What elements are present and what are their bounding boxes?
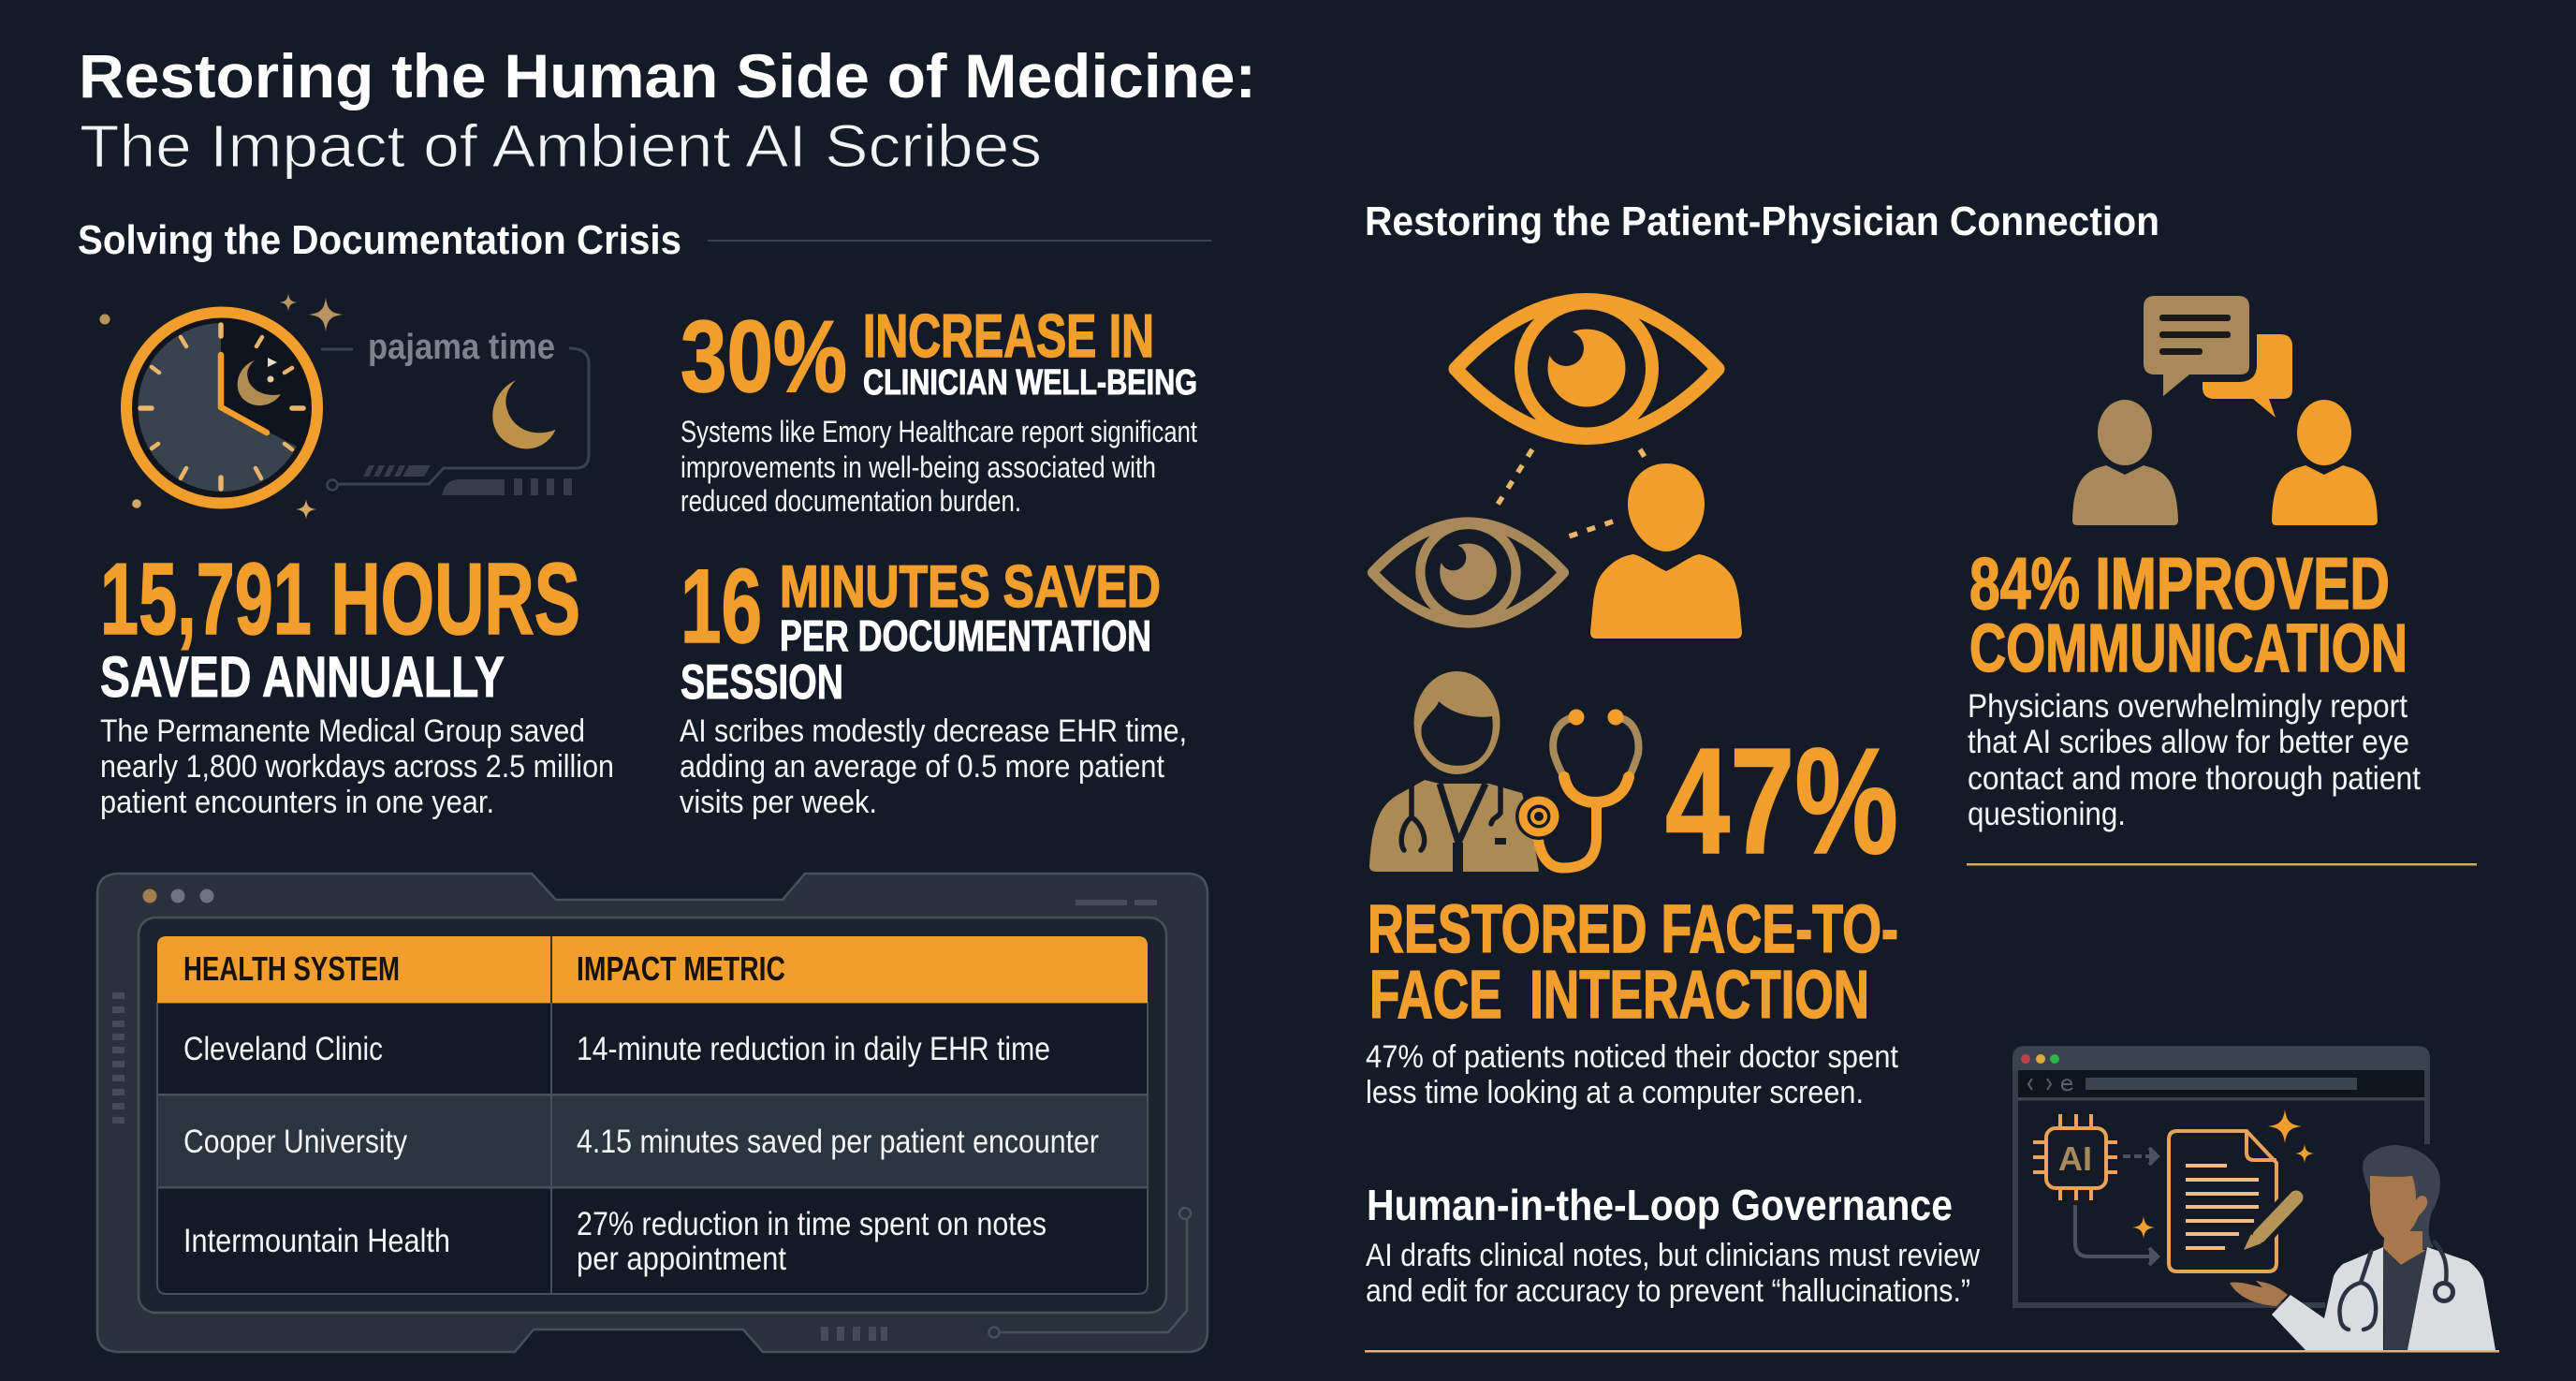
stat: 16 minutes saved: PER DOCUMENTATION — [780, 611, 1151, 660]
clock — [126, 313, 317, 504]
stat: 15,791 hours saved annually — [100, 542, 614, 820]
stat: 15,791 hours saved annually: 15,791 HOURS — [100, 542, 580, 656]
illustration: AI drafting with clinician review — [2012, 1047, 2496, 1350]
text: ehr description: visits per week. — [680, 785, 877, 820]
stethoscope — [1515, 710, 1638, 868]
stat: 16 minutes saved: 16 — [681, 548, 762, 665]
text: permanente description: nearly 1,800 workdays across 2.5 million — [100, 749, 614, 785]
row: cleveland clinic: 14-minute reduction in daily EHR time — [577, 1031, 1050, 1067]
row: cleveland clinic: Cleveland Clinic — [183, 1031, 383, 1067]
text: physicians description: that AI scribes allow for better eye — [1968, 724, 2409, 760]
person right — [2272, 400, 2378, 525]
text: computer screen description — [1366, 1039, 1898, 1110]
heading: restoring the patient-physician connection: Restoring the Patient-Physician Connection — [1365, 198, 2159, 244]
icon: eye contact — [1372, 300, 1742, 639]
text: emory description: Systems like Emory Healthcare report significant — [681, 415, 1197, 448]
panel: health system table — [97, 874, 1208, 1352]
tablet frame — [97, 874, 1208, 1352]
arrows: chip to document — [2075, 1148, 2158, 1265]
icon: small eye — [1372, 522, 1564, 623]
table header: IMPACT METRIC — [577, 949, 785, 988]
table header — [157, 936, 1148, 1003]
row: cooper university: Cooper University — [183, 1124, 407, 1160]
text: ehr description: AI scribes modestly decrease EHR time, — [680, 713, 1187, 749]
icon: document — [2169, 1131, 2276, 1271]
clinician figure — [2230, 1145, 2496, 1350]
text: physicians description: Physicians overwhelmingly report — [1968, 688, 2408, 725]
text: ehr description — [680, 713, 1187, 820]
text: permanente description: The Permanente Medical Group saved — [100, 713, 585, 749]
stat: 16 minutes saved — [680, 548, 1187, 820]
icon: AI chip — [2033, 1114, 2117, 1200]
row: intermountain health: per appointment — [577, 1241, 786, 1277]
icon: doctor with stethoscope — [1369, 671, 1638, 873]
title — [79, 41, 1256, 180]
stat: 47% restored face-to-face interaction: 47% — [1665, 717, 1898, 886]
text: human-in-the-loop governance: and edit for accuracy to prevent “hallucinations.” — [1366, 1273, 1970, 1309]
text: physicians description: contact and more thorough patient — [1968, 760, 2421, 797]
stat: 16 minutes saved: MINUTES SAVED — [780, 554, 1161, 620]
stat: 84% improved communication — [1968, 542, 2421, 832]
row: intermountain health: Intermountain Health — [183, 1223, 450, 1259]
stat: 16 minutes saved: SESSION — [681, 655, 843, 710]
person left — [2072, 400, 2178, 525]
icon: patient — [1590, 463, 1742, 639]
text: human-in-the-loop governance — [1366, 1181, 1980, 1309]
row: intermountain health — [183, 1206, 1046, 1277]
stat: 30% increase in clinician well-being: CLINICIAN WELL-BEING — [863, 363, 1197, 403]
title: The Impact of Ambient AI Scribes — [80, 112, 1042, 180]
text: permanente description — [100, 713, 614, 820]
stat: 84% improved communication: 84% IMPROVED — [1969, 542, 2390, 624]
text: human-in-the-loop governance: Human-in-the-Loop Governance — [1367, 1181, 1953, 1229]
text: computer screen description: 47% of patients noticed their doctor spent — [1366, 1039, 1898, 1075]
dashed sight lines — [1496, 449, 1645, 539]
table rows — [157, 1003, 1148, 1294]
icon: AI chip: AI — [2058, 1139, 2092, 1178]
row: cooper university: 4.15 minutes saved per patient encounter — [577, 1124, 1099, 1160]
label: pajama time: pajama time — [368, 328, 555, 367]
text: emory description: improvements in well-being associated with — [681, 450, 1156, 484]
row: cooper university — [183, 1124, 1099, 1160]
stat: 30% increase in clinician well-being — [681, 300, 1197, 518]
doctor figure — [1369, 671, 1539, 873]
sparkles — [2132, 1109, 2314, 1239]
row: cleveland clinic — [183, 1031, 1050, 1067]
text: computer screen description: less time looking at a computer screen. — [1366, 1075, 1864, 1110]
stat: 30% increase in clinician well-being: 30% — [681, 300, 847, 414]
browser window — [2012, 1047, 2430, 1305]
text: physicians description: questioning. — [1968, 796, 2126, 832]
text: ehr description: adding an average of 0.5 more patient — [680, 749, 1164, 785]
icon: moon — [492, 380, 556, 448]
text: emory description — [681, 415, 1197, 518]
row: intermountain health: 27% reduction in time spent on notes — [577, 1206, 1046, 1242]
stat: 15,791 hours saved annually: SAVED ANNUALLY — [100, 645, 505, 709]
heading: solving the documentation crisis: Solving the Documentation Crisis — [78, 217, 681, 263]
stat: 84% improved communication: COMMUNICATION — [1969, 611, 2408, 686]
speech bubble tan — [2144, 296, 2253, 396]
stat: 47% restored face-to-face interaction: RESTORED FACE-TO- — [1368, 892, 1898, 967]
speech bubble orange — [2203, 334, 2292, 418]
table header: HEALTH SYSTEM — [183, 949, 400, 988]
stat: 47% restored face-to-face interaction — [1366, 717, 1898, 1110]
text: emory description: reduced documentation burden. — [681, 484, 1021, 518]
stat: 30% increase in clinician well-being: INCREASE IN — [863, 301, 1154, 370]
sparkles — [99, 294, 343, 520]
title: Restoring the Human Side of Medicine: — [79, 41, 1256, 110]
stat: 47% restored face-to-face interaction: FACE INTERACTION — [1369, 958, 1869, 1033]
icon: conversation — [2072, 296, 2378, 525]
text: human-in-the-loop governance: AI drafts clinical notes, but clinicians must review — [1366, 1238, 1980, 1273]
pajama panel frame — [321, 348, 589, 495]
text: permanente description: patient encounters in one year. — [100, 785, 494, 820]
tablet details — [112, 889, 1191, 1341]
icon: clock with pajama time — [99, 294, 589, 520]
icon: pencil — [2244, 1197, 2297, 1250]
text: physicians description — [1968, 688, 2421, 832]
icon: large eye — [1456, 300, 1718, 438]
